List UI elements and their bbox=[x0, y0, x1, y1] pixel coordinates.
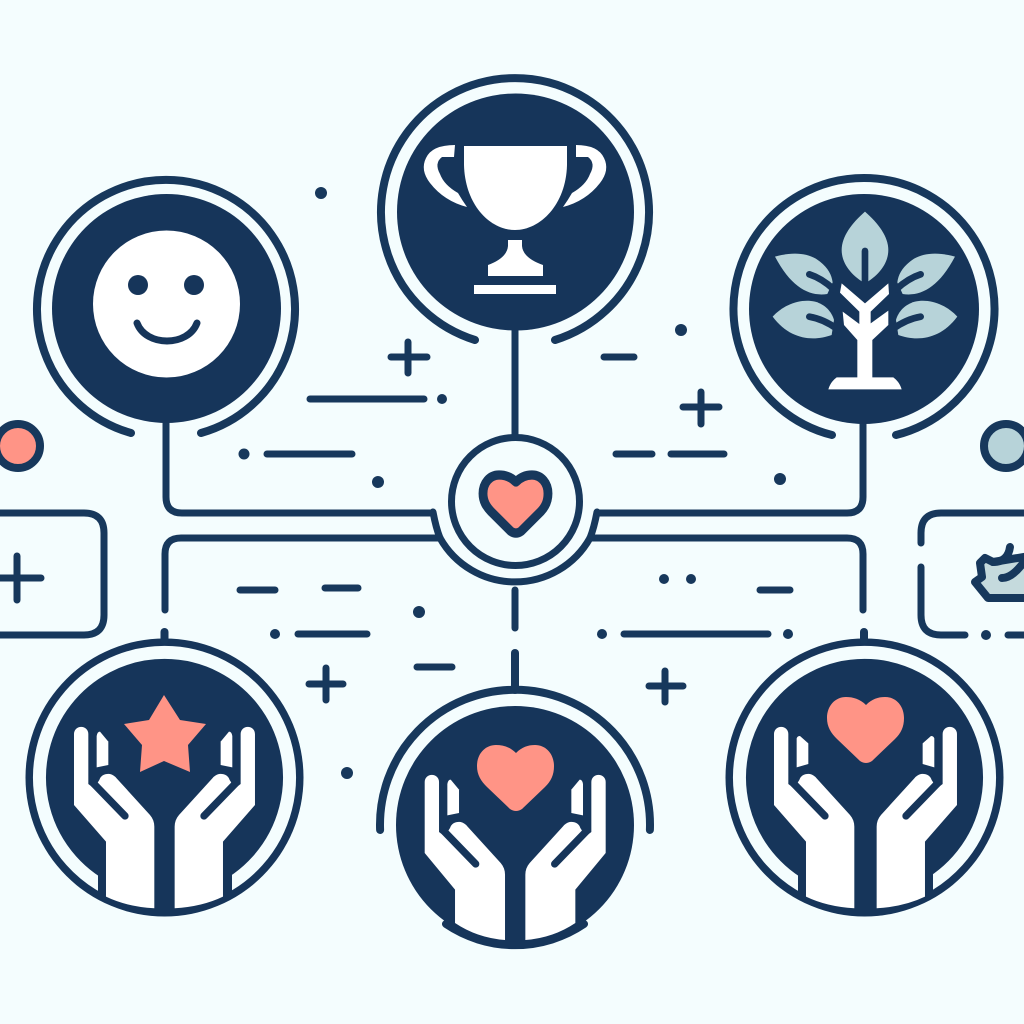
bottom disk bbox=[396, 706, 634, 944]
icon: smiling face bbox=[93, 230, 240, 378]
bottom stem bbox=[511, 653, 519, 690]
panel: hands with right heart bbox=[726, 632, 1004, 916]
connector lines bbox=[165, 329, 863, 628]
right panel gap mask bbox=[798, 870, 933, 895]
panel: center heart hub bbox=[440, 438, 590, 582]
panel: left box with plus bbox=[0, 513, 104, 635]
panel: right box with leaf bbox=[921, 513, 1024, 635]
right blue node bbox=[984, 424, 1024, 468]
left coral node bbox=[0, 424, 40, 468]
panel: trophy bbox=[381, 78, 649, 340]
smiley ring bbox=[37, 180, 295, 433]
hub inner ring bbox=[452, 438, 580, 566]
star panel gap mask bbox=[98, 870, 232, 895]
trophy ring bbox=[381, 78, 649, 340]
icon: cupped hands bbox=[774, 727, 957, 908]
tree leaf veins bbox=[809, 251, 921, 329]
icon: star bbox=[124, 695, 206, 772]
trophy disk bbox=[397, 94, 634, 330]
decorative dashes, dots and signs bbox=[238, 187, 991, 779]
panel: smiley bbox=[37, 180, 295, 433]
icon: cupped hands bbox=[74, 727, 255, 908]
icon: center heart bbox=[483, 475, 548, 533]
tree ring bbox=[733, 178, 994, 435]
icon: tree leaves bbox=[773, 212, 957, 338]
icon: heart bbox=[827, 697, 904, 763]
icon: tree trunk bbox=[828, 283, 902, 389]
icon: cupped hands bbox=[425, 775, 606, 940]
right panel ring gap bbox=[740, 652, 990, 892]
smiley disk bbox=[52, 194, 281, 423]
bottom disk lower band bbox=[446, 924, 584, 945]
icon: plus bbox=[0, 556, 41, 600]
right panel nub bbox=[860, 632, 868, 640]
leaf stalk bbox=[993, 547, 1010, 562]
panel: hands with star bbox=[26, 632, 304, 916]
icon: heart bbox=[477, 745, 554, 811]
icon: leaf bbox=[975, 556, 1024, 598]
leaf vein bbox=[1002, 556, 1024, 578]
tree disk bbox=[749, 194, 979, 424]
star panel outer ring bbox=[26, 638, 304, 916]
panel: tree bbox=[733, 178, 994, 435]
icon: trophy bbox=[424, 145, 606, 294]
hub outer arc bbox=[440, 538, 590, 582]
star panel nub bbox=[160, 632, 168, 640]
right panel outer ring bbox=[726, 638, 1004, 916]
panel: hands with bottom heart bbox=[380, 653, 650, 945]
bottom ring arc bbox=[380, 690, 650, 830]
star panel ring gap bbox=[40, 652, 290, 892]
